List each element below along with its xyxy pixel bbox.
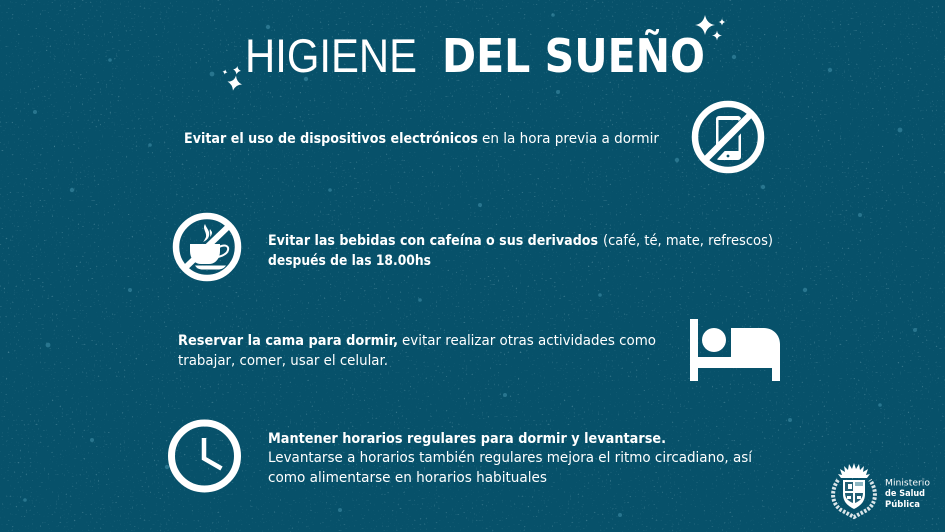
text block: regular schedules: Levantarse a horarios también regulares mejora el ritmo circadiano, así [268,450,753,466]
text block: regular schedules: como alimentarse en horarios habituales [268,470,547,486]
text block: bed use: Reservar la cama para dormir, [178,333,398,349]
icon: no coffee [176,216,238,278]
text block: caffeine: (café, té, mate, refrescos) [603,233,773,249]
logo: Ministerio de Salud Pública: Pública [885,500,920,510]
logo: Ministerio de Salud Pública [833,463,931,517]
logo: Ministerio de Salud Pública: Ministerio [885,478,931,488]
icon: bed [690,319,780,381]
title [245,29,705,83]
title: HIGIENE [245,29,417,82]
text block: caffeine: después de las 18.00hs [268,253,431,269]
text block: regular schedules [268,431,753,486]
text block: bed use [178,333,656,369]
title: DEL SUEÑO [442,29,705,83]
icon: sparkles top right [695,15,726,40]
text block: electronic devices: en la hora previa a dormir [482,131,659,147]
text block: caffeine: Evitar las bebidas con cafeína o sus derivados [268,233,598,249]
icon: no phone [695,104,761,170]
text block: bed use: evitar realizar otras actividades como [402,333,656,349]
logo: Ministerio de Salud Pública: de Salud [885,489,925,499]
text block: bed use: trabajar, comer, usar el celular. [178,353,388,369]
text block: regular schedules: Mantener horarios regulares para dormir y levantarse. [268,431,666,447]
text block: electronic devices: Evitar el uso de dispositivos electrónicos [184,131,478,147]
text block: caffeine [268,233,773,269]
icon: sparkles bottom left [222,66,242,90]
icon: clock [172,423,238,489]
icon: coat of arms [833,463,875,517]
